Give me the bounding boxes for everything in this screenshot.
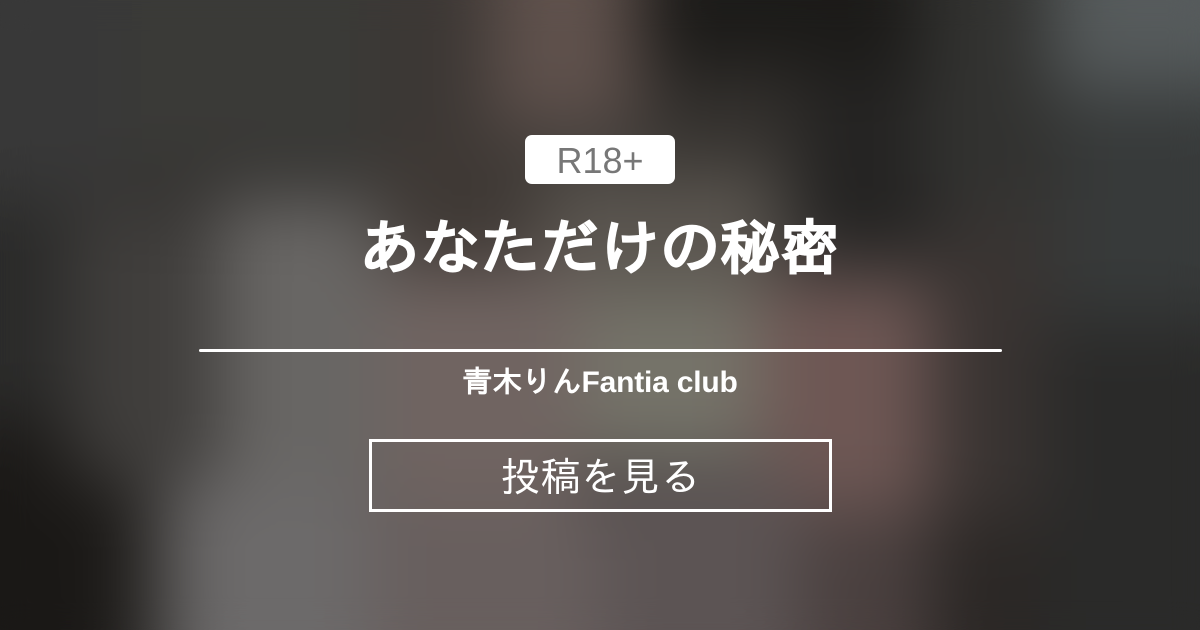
view posts button [369, 439, 832, 512]
club name: 青木りんFantia club [462, 366, 738, 399]
divider line [199, 349, 1002, 352]
title: あなただけの秘密 [360, 217, 840, 277]
R18+ badge [525, 135, 675, 184]
R18+ badge: R18+ [556, 140, 644, 181]
view posts button: 投稿を見る [500, 456, 700, 496]
